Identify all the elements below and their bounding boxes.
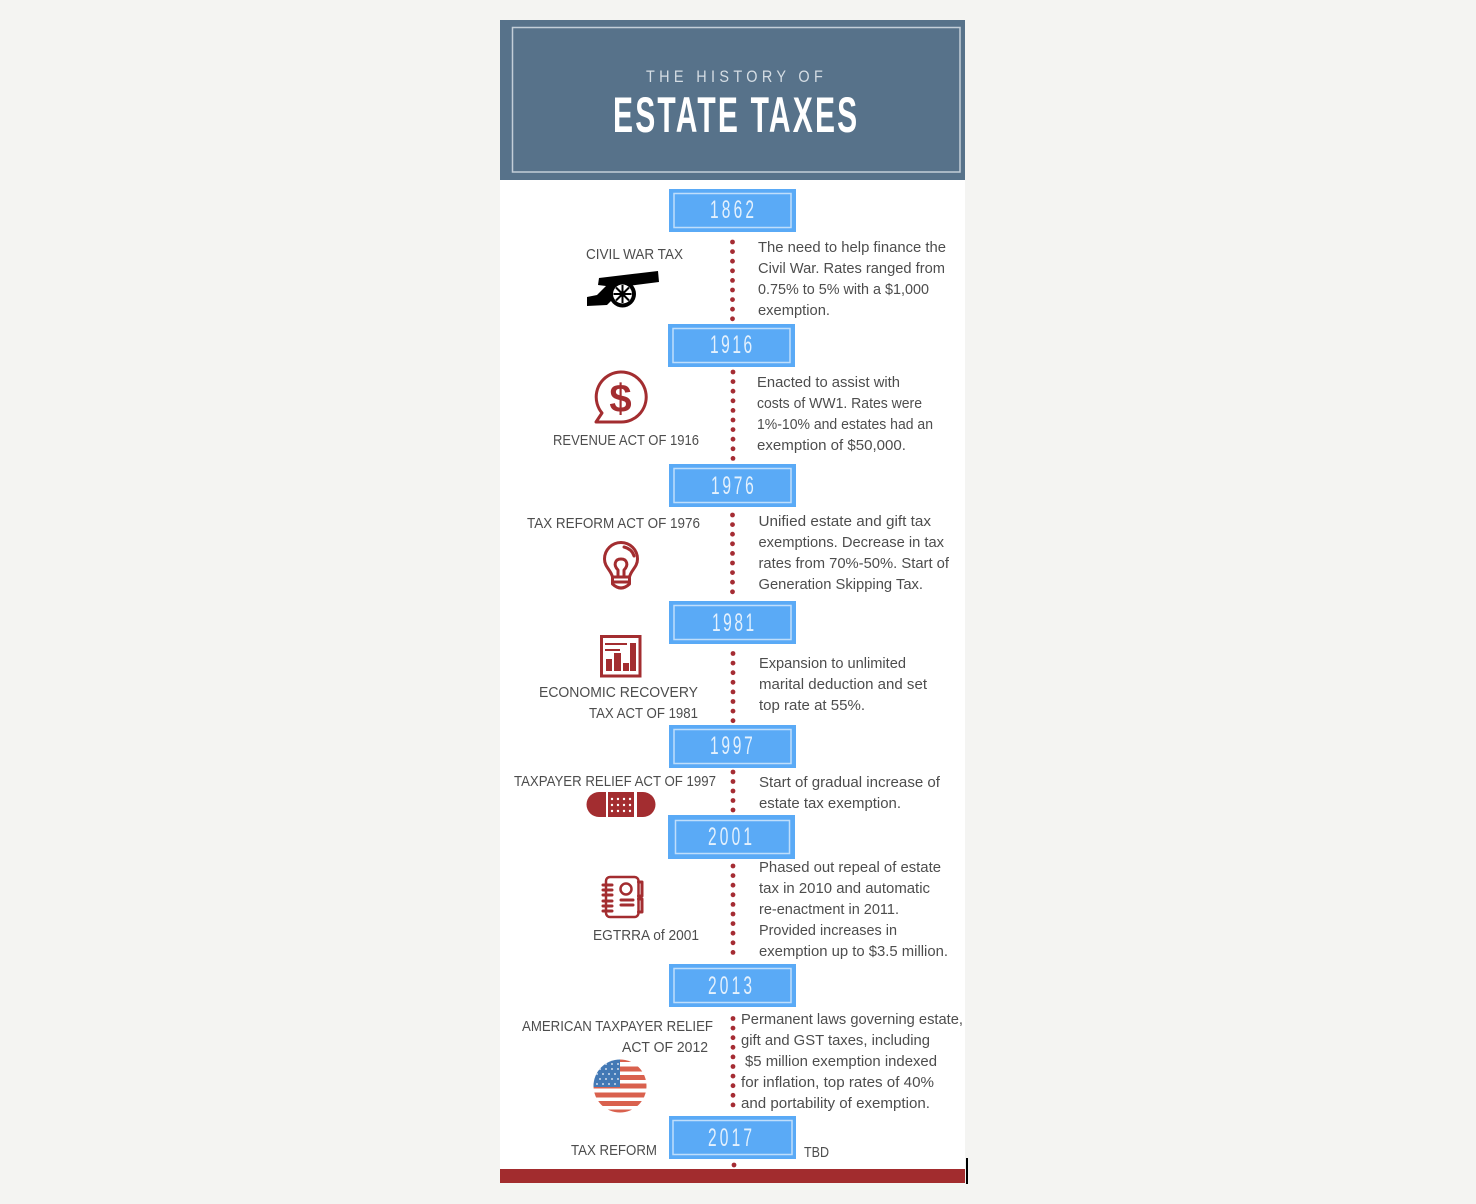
timeline end dot: [732, 1163, 736, 1167]
label: economic recovery tax act of 1981: [539, 684, 698, 722]
description 2001: re-enactment in 2011.: [759, 901, 899, 918]
icon: cannon: [587, 271, 659, 308]
icon: bar chart report: [602, 636, 640, 676]
dotted connector: [731, 864, 735, 955]
year badge 2013: [669, 964, 796, 1007]
dotted connector: [731, 1016, 735, 1107]
cursor line: [966, 1158, 968, 1184]
dotted connector: [731, 651, 735, 723]
year badge 1997: [669, 725, 796, 768]
year badge 2001: [668, 815, 795, 859]
description 1862: exemption.: [758, 302, 830, 319]
label: egtrra of 2001: EGTRRA of 2001: [593, 927, 699, 944]
era: 1976 tax reform act: [527, 464, 950, 594]
description 2013: Permanent laws governing estate,: [741, 1011, 963, 1028]
description 1916: exemption of $50,000.: [757, 437, 906, 454]
icon: american flag circle: [593, 1059, 647, 1114]
description 2001: [759, 859, 948, 960]
description 2001: Phased out repeal of estate: [759, 859, 941, 876]
label: economic recovery tax act of 1981: ECONOMIC RECOVERY: [539, 684, 698, 701]
description 1862: 0.75% to 5% with a $1,000: [758, 281, 929, 298]
icon: light bulb: [604, 542, 638, 588]
description 1981: Expansion to unlimited: [759, 655, 906, 672]
description 1862: [758, 239, 946, 319]
dotted connector: [731, 770, 735, 812]
icon: bandage: [586, 792, 656, 817]
year badge 2017: 2017: [708, 1124, 752, 1152]
description: tbd: TBD: [804, 1144, 829, 1161]
description 1916: 1%-10% and estates had an: [757, 416, 933, 433]
year badge 2017: [669, 1116, 796, 1159]
description 1916: [757, 374, 933, 454]
icon: dollar speech bubble: [596, 372, 646, 422]
era: 2013 american taxpayer relief act: [522, 964, 963, 1114]
description 1976: Unified estate and gift tax: [758, 513, 931, 530]
description 2013: for inflation, top rates of 40%: [741, 1074, 934, 1091]
description 2013: and portability of exemption.: [741, 1095, 930, 1112]
footer bar: [500, 1169, 965, 1183]
dotted connector: [731, 370, 735, 461]
description 2013: $5 million exemption indexed: [745, 1053, 937, 1070]
description 1997: Start of gradual increase of: [759, 774, 941, 791]
description 1862: Civil War. Rates ranged from: [758, 260, 945, 277]
label: civil war tax: CIVIL WAR TAX: [586, 246, 683, 263]
dotted connector: [730, 513, 735, 594]
description 2013: [741, 1011, 963, 1112]
year badge 1862: [669, 189, 796, 232]
era: 2017 tax reform: [571, 1116, 829, 1167]
year badge 1976: 1976: [711, 472, 754, 500]
label: american taxpayer relief act of 2012: AMERICAN TAXPAYER RELIEF: [522, 1018, 713, 1035]
dotted connector: [730, 240, 735, 321]
era: 1916 revenue act: [553, 324, 933, 461]
description 1976: [758, 513, 950, 593]
year badge 1976: [669, 464, 796, 507]
description 1981: [759, 655, 928, 714]
description 2013: gift and GST taxes, including: [741, 1032, 930, 1049]
description 1916: Enacted to assist with: [757, 374, 900, 391]
description 2001: Provided increases in: [759, 922, 897, 939]
label: tax reform: TAX REFORM: [571, 1142, 657, 1159]
title: ESTATE TAXES: [613, 87, 857, 143]
description 1976: exemptions. Decrease in tax: [758, 534, 944, 551]
description 1997: [759, 774, 941, 812]
icon: dollar speech bubble: $: [609, 377, 632, 421]
description 1981: marital deduction and set: [759, 676, 928, 693]
description 1862: The need to help finance the: [758, 239, 946, 256]
label: american taxpayer relief act of 2012: ACT OF 2012: [622, 1039, 708, 1056]
subtitle: THE HISTORY OF: [646, 68, 823, 86]
year badge 1916: [668, 324, 795, 367]
label: american taxpayer relief act of 2012: [522, 1018, 713, 1056]
description 2001: tax in 2010 and automatic: [759, 880, 930, 897]
era: 2001 egtrra: [593, 815, 948, 960]
description 1997: estate tax exemption.: [759, 795, 901, 812]
description 2001: exemption up to $3.5 million.: [759, 943, 948, 960]
header banner: [500, 20, 965, 180]
era: 1997 taxpayer relief act: [514, 725, 941, 817]
label: tax reform act of 1976: TAX REFORM ACT OF 1976: [527, 515, 700, 532]
year badge 2013: 2013: [708, 972, 752, 1000]
description 1981: top rate at 55%.: [759, 697, 865, 714]
year badge 1981: 1981: [712, 609, 754, 637]
era: 1862 civil war tax: [586, 189, 946, 321]
year badge 1997: 1997: [710, 732, 753, 760]
label: taxpayer relief act of 1997: TAXPAYER RELIEF ACT OF 1997: [514, 773, 716, 790]
year badge 1916: 1916: [710, 331, 752, 359]
description 1976: Generation Skipping Tax.: [758, 576, 923, 593]
label: revenue act of 1916: REVENUE ACT OF 1916: [553, 432, 699, 449]
year badge 1981: [669, 601, 796, 644]
icon: address notebook: [603, 877, 642, 917]
year badge 1862: 1862: [710, 196, 754, 224]
description 1916: costs of WW1. Rates were: [757, 395, 922, 412]
year badge 2001: 2001: [708, 823, 752, 851]
description 1976: rates from 70%-50%. Start of: [758, 555, 950, 572]
era: 1981 economic recovery tax act: [539, 601, 928, 723]
label: economic recovery tax act of 1981: TAX ACT OF 1981: [589, 705, 698, 722]
